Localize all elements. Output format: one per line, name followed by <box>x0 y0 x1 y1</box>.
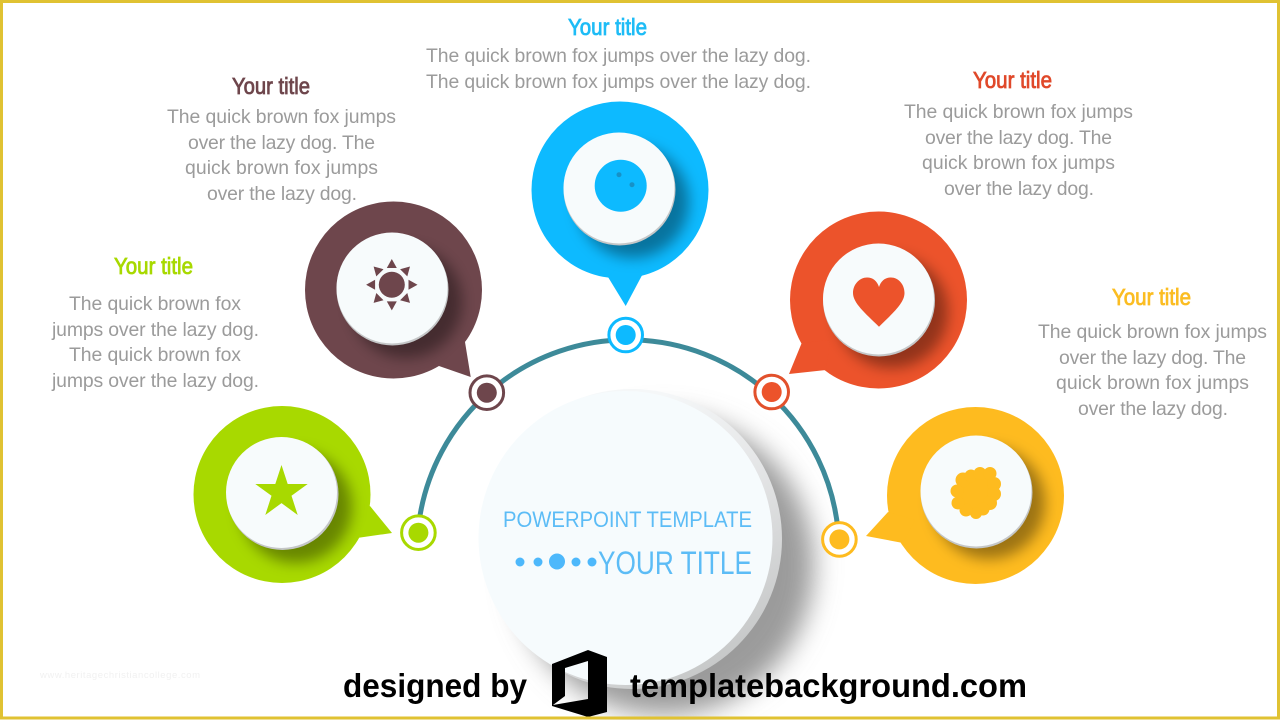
icon: star <box>255 465 308 515</box>
central disc shadow <box>514 415 814 715</box>
node: brown <box>470 376 504 410</box>
icon: sun <box>366 259 418 310</box>
pin: green star <box>194 406 392 583</box>
credit: website: templatebackground.com <box>630 667 1027 704</box>
body: red: The quick brown fox jumps <box>904 101 1133 123</box>
node: blue <box>609 318 642 352</box>
title: brown: Your title <box>232 73 310 99</box>
body: green: The quick brown fox <box>69 344 241 366</box>
icon: blob <box>950 467 1001 519</box>
title: yellow: Your title <box>1112 284 1191 310</box>
title: blue: Your title <box>568 14 647 40</box>
icon: office logo <box>552 650 607 717</box>
dots row <box>516 554 596 570</box>
body: green: The quick brown fox <box>69 293 241 315</box>
body: brown <box>167 106 396 205</box>
body: blue: The quick brown fox jumps over the lazy dog. <box>426 71 811 93</box>
body: green <box>51 293 259 392</box>
icon: ball <box>595 160 647 212</box>
body: red: quick brown fox jumps <box>922 152 1115 174</box>
body: yellow <box>1038 321 1267 420</box>
body: brown: quick brown fox jumps <box>185 157 378 179</box>
body: brown: over the lazy dog. The <box>188 132 375 154</box>
pin: red heart <box>789 212 967 388</box>
text block: red <box>904 67 1133 200</box>
node: red <box>755 375 788 409</box>
body: blue: The quick brown fox jumps over the lazy dog. <box>426 45 811 67</box>
central disc <box>478 389 782 689</box>
title: green: Your title <box>114 253 193 279</box>
pin: yellow cloud <box>866 407 1064 584</box>
body: yellow: over the lazy dog. The <box>1059 347 1246 369</box>
body: red: over the lazy dog. <box>944 178 1094 200</box>
heading: powerpoint template: POWERPOINT TEMPLATE <box>503 507 752 532</box>
title: red: Your title <box>973 67 1052 93</box>
body: red <box>904 101 1133 200</box>
node: yellow <box>823 523 856 556</box>
credit: designed by: designed by <box>343 667 528 704</box>
text block: green <box>51 253 259 392</box>
watermark: www.heritagechristiancollege.com <box>39 670 200 681</box>
text block: brown <box>167 73 396 205</box>
body: blue <box>426 45 811 93</box>
heading: your title: YOUR TITLE <box>598 545 752 581</box>
body: yellow: quick brown fox jumps <box>1056 372 1249 394</box>
body: red: over the lazy dog. The <box>925 127 1112 149</box>
body: green: jumps over the lazy dog. <box>51 319 259 341</box>
body: brown: The quick brown fox jumps <box>167 106 396 128</box>
body: green: jumps over the lazy dog. <box>51 370 259 392</box>
pin: blue circle <box>532 102 708 306</box>
text block: yellow <box>1038 284 1267 420</box>
node: green <box>402 516 435 550</box>
timeline arc <box>419 340 838 530</box>
pin: brown sun <box>305 202 482 378</box>
text block: blue <box>426 14 811 93</box>
body: yellow: over the lazy dog. <box>1078 398 1228 420</box>
body: brown: over the lazy dog. <box>207 183 357 205</box>
icon: heart <box>853 278 904 327</box>
body: yellow: The quick brown fox jumps <box>1038 321 1267 343</box>
